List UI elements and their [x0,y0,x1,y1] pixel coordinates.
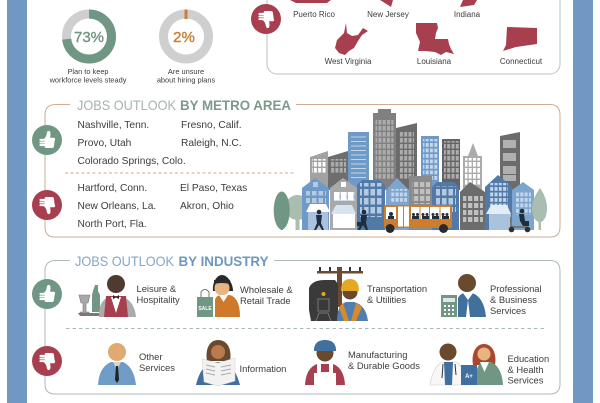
panel: metro area [32,97,560,237]
icon: thumbs down states [251,4,281,34]
front row houses [302,175,534,230]
bus [384,205,452,233]
state: Connecticut [500,27,543,66]
heading: jobs outlook by metro area: BY METRO AREA [180,97,291,113]
industry: education and health services: A+ [465,374,473,380]
caption: unsure: about hiring plans [157,76,215,84]
list: metros with strong outlook: Colorado Springs, Colo. [78,156,186,167]
caption: workforce steady [49,67,127,84]
pedestrian left [314,210,324,230]
list: metros with strong outlook: Nashville, Tenn. [78,120,149,131]
heading: jobs outlook by metro area [77,97,291,113]
panel: industry [32,253,560,394]
list: metros with strong outlook [78,120,242,167]
heading: jobs outlook by industry: JOBS OUTLOOK [75,253,175,269]
heading: jobs outlook by industry: BY INDUSTRY [178,253,269,269]
industry: information [196,340,286,386]
industry: professional and business services: & Business [490,294,537,305]
donut chart: 2 percent [164,10,208,59]
state: Connecticut: Connecticut [500,57,543,66]
state: West Virginia [325,23,372,66]
list: metros with strong outlook: Provo, Utah [78,138,131,149]
state: New Jersey: New Jersey [367,10,409,19]
state: New Jersey [367,0,409,19]
heading: jobs outlook by industry [75,253,269,269]
industry: other services [98,343,175,385]
industry: education and health services: & Health [508,364,543,375]
icon: thumbs down industry [32,346,62,376]
list: metros with weak outlook [78,183,247,230]
donut chart: 2 percent: 2% [173,29,195,46]
industry: transportation and utilities: Transportation [367,283,427,294]
list: metros with weak outlook: El Paso, Texas [180,183,247,194]
caption: workforce steady: workforce levels steady [49,76,127,84]
list: metros with strong outlook: Fresno, Calif. [181,120,242,131]
pedestrian middle [357,210,368,230]
industry: wholesale and retail trade: SALE [198,306,212,312]
list: metros with strong outlook: Raleigh, N.C. [181,138,242,149]
industry: education and health services: Education [508,353,549,364]
industry: education and health services [430,344,549,386]
tree right [532,188,547,230]
industry: information: Information [240,363,286,374]
industry: education and health services: Services [508,374,544,386]
left side bar [7,0,27,403]
industry: wholesale and retail trade: Retail Trade [240,295,291,306]
industry: leisure and hospitality: Leisure & [136,283,177,294]
illustration: city skyline [274,109,547,233]
industry: professional and business services [441,274,542,317]
industry: leisure and hospitality: Hospitality [136,294,180,305]
list: metros with weak outlook: Hartford, Conn. [78,183,147,194]
industry: manufacturing and durable goods: & Durable Goods [348,360,420,371]
state: Puerto Rico [290,0,335,19]
scooter rider [509,209,530,232]
industry: manufacturing and durable goods [305,340,420,385]
industry: professional and business services: Professional [490,283,542,294]
industry: wholesale and retail trade: Wholesale & [240,284,293,295]
industry: other services: Other [139,351,162,362]
icon: thumbs up metro [32,125,62,155]
caption: unsure: Are unsure [168,67,204,76]
list: metros with weak outlook: North Port, Fla. [78,219,147,230]
list: metros with weak outlook: Akron, Ohio [180,201,234,212]
icon: thumbs up industry [32,279,62,309]
caption: workforce steady: Plan to keep [67,67,109,76]
caption: unsure [157,67,215,84]
industry: other services: Services [139,362,175,373]
industry: transportation and utilities: & Utilities [367,294,406,305]
right side bar [573,0,593,403]
list: metros with weak outlook: New Orleans, La. [78,201,156,212]
industry: leisure and hospitality [78,275,180,317]
donut chart: 73 percent: 73% [74,29,104,46]
panel: states outlook [267,0,560,74]
state: Louisiana: Louisiana [417,57,452,66]
shop fronts [306,204,511,230]
industry: transportation and utilities [309,267,427,321]
state: Indiana [454,0,481,19]
trees left [274,192,310,230]
state: Puerto Rico: Puerto Rico [293,10,335,19]
heading: jobs outlook by metro area: JOBS OUTLOOK [77,97,177,113]
industry: professional and business services: Services [490,305,526,316]
back towers [310,109,520,190]
icon: thumbs down metro [32,190,62,220]
state: Indiana: Indiana [454,10,481,19]
donut chart: 73 percent [66,14,112,59]
state: West Virginia: West Virginia [325,57,372,66]
industry: wholesale and retail trade [197,275,293,317]
state: Louisiana [416,23,454,66]
industry: manufacturing and durable goods: Manufacturing [348,349,407,360]
